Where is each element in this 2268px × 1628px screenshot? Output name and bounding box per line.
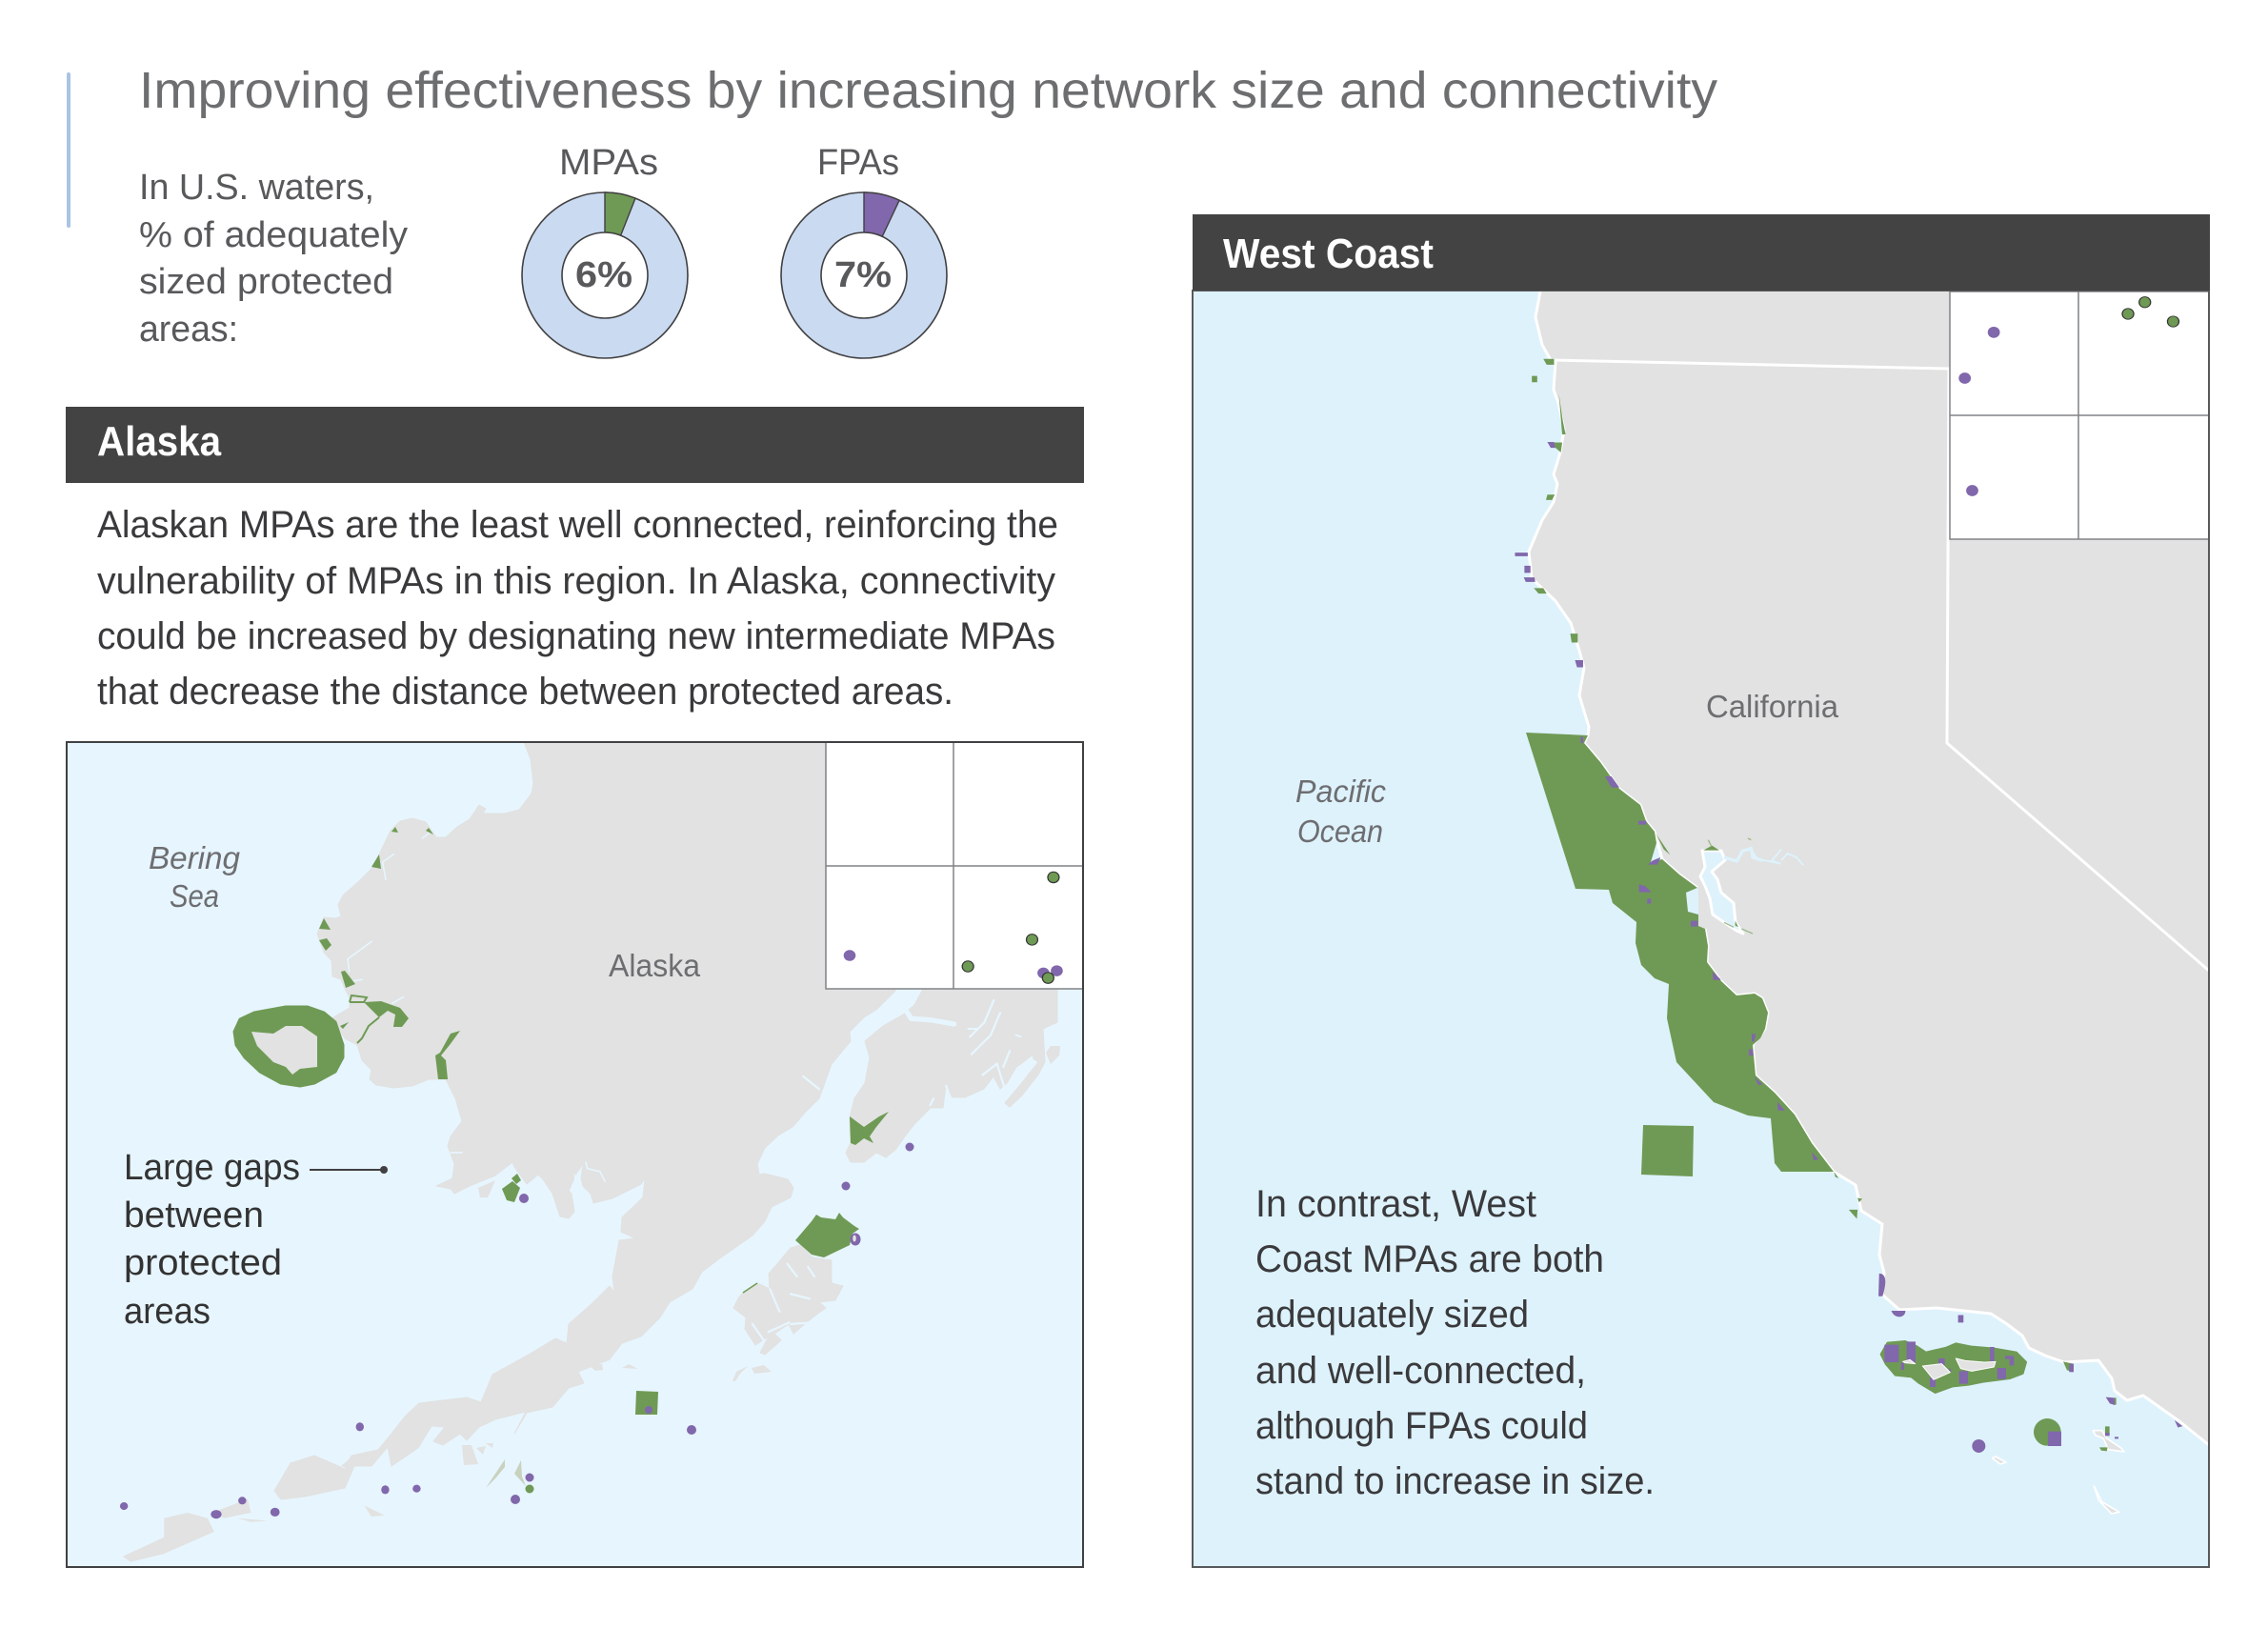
label: Alaska: Alaska: [609, 948, 701, 983]
Alaska land masses: [123, 742, 1060, 1562]
donut chart: MPAs 6%: 6%: [575, 255, 632, 295]
panel heading: Alaska: [66, 407, 1084, 483]
West Coast callout text: [1255, 1183, 1655, 1502]
donut chart: MPAs 6%: MPAs: [559, 143, 658, 183]
donut chart: FPAs 7%: [781, 143, 947, 358]
coastline and state borders: [1529, 291, 2209, 1445]
West Coast callout text: and well-connected,: [1255, 1350, 1586, 1392]
channels and fjords: [803, 1000, 1032, 1105]
callout: large gaps: protected: [124, 1243, 282, 1283]
California and neighbouring land: [1529, 291, 2209, 1445]
label: Bering Sea: Sea: [170, 878, 219, 914]
donut chart: FPAs 7%: 7%: [834, 255, 892, 295]
title: Improving effectiveness by increasing network size and connectivity: [139, 62, 1717, 119]
West Coast callout text: stand to increase in size.: [1255, 1460, 1655, 1502]
intro text: [139, 168, 408, 350]
San Francisco Bay: [1656, 834, 1803, 934]
label: Bering Sea: Bering: [149, 840, 241, 875]
Alaska paragraph: that decrease the distance between protected areas.: [97, 671, 953, 713]
map: West Coast: [1193, 291, 2210, 1567]
West Coast callout text: adequately sized: [1255, 1294, 1529, 1336]
label: Pacific Ocean: [1295, 774, 1386, 849]
West Coast protected areas: [1515, 359, 2182, 1428]
map: Alaska: [67, 742, 1083, 1567]
intro text: % of adequately: [139, 215, 408, 255]
label: California: California: [1706, 689, 1839, 724]
West Coast callout text: Coast MPAs are both: [1255, 1238, 1604, 1280]
panel heading: West Coast: West Coast: [1223, 231, 1434, 277]
callout: large gaps: Large gaps: [124, 1148, 300, 1188]
Alaska paragraph: Alaskan MPAs are the least well connected, reinforcing the: [97, 504, 1058, 546]
label: Bering Sea: [149, 840, 241, 914]
panel heading: Alaska: Alaska: [97, 418, 221, 465]
donut chart: FPAs 7%: FPAs: [817, 143, 899, 183]
callout: large gaps: [124, 1148, 388, 1332]
Alaska paragraph: vulnerability of MPAs in this region. In Alaska, connectivity: [97, 560, 1055, 602]
label: Pacific Ocean: Pacific: [1295, 774, 1386, 809]
Alaska protected areas: [120, 827, 914, 1518]
panel heading: West Coast: [1193, 214, 2210, 291]
callout: large gaps: areas: [124, 1292, 211, 1332]
Alaska paragraph: could be increased by designating new intermediate MPAs: [97, 615, 1055, 657]
intro text: sized protected: [139, 262, 393, 302]
Channel Islands: [1881, 1341, 2124, 1514]
West Coast size legend inset: [1950, 291, 2209, 539]
intro text: areas:: [139, 310, 238, 350]
Alaska size legend inset: [826, 742, 1083, 989]
West Coast callout text: although FPAs could: [1255, 1405, 1588, 1447]
accent bar: [67, 72, 70, 228]
label: Pacific Ocean: Ocean: [1297, 814, 1383, 849]
intro text: In U.S. waters,: [139, 168, 374, 208]
Alaska paragraph: [97, 504, 1058, 713]
callout: large gaps: between: [124, 1196, 264, 1236]
donut chart: MPAs 6%: [522, 143, 688, 358]
West Coast callout text: In contrast, West: [1255, 1183, 1536, 1225]
